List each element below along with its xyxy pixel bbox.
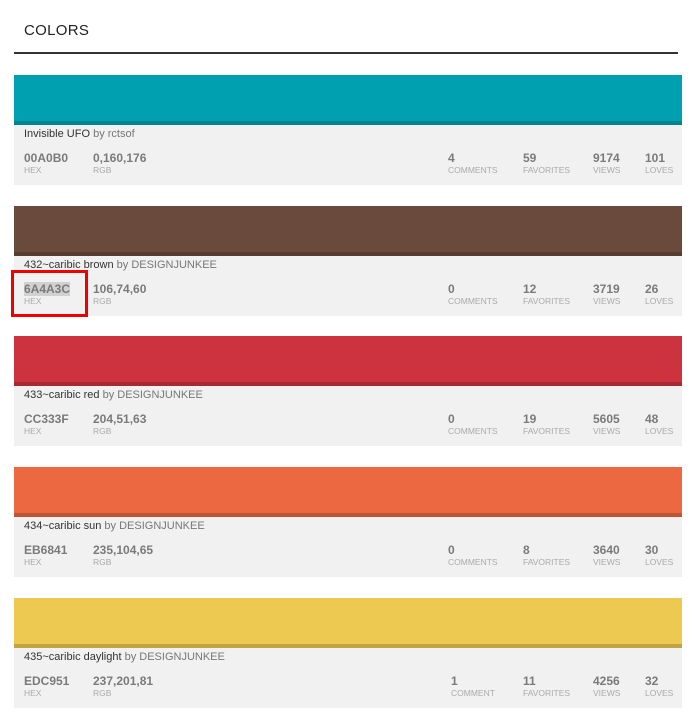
info panel: HEX — [24, 688, 41, 698]
info panel: 48 — [645, 412, 658, 426]
info panel: 0 — [448, 543, 455, 557]
info panel: LOVES — [645, 557, 673, 567]
info panel: 12 — [523, 282, 536, 296]
info panel: 101 — [645, 151, 665, 165]
card: caribic daylight — [14, 598, 682, 708]
info panel: 434~caribic sun by DESIGNJUNKEE — [24, 520, 205, 532]
info panel: 9174 — [593, 151, 620, 165]
info panel: 237,201,81 — [93, 674, 153, 688]
info panel: 204,51,63 — [93, 412, 146, 426]
info panel: 8 — [523, 543, 530, 557]
info panel: LOVES — [645, 296, 673, 306]
info panel — [14, 386, 682, 446]
swatch — [14, 598, 682, 648]
info panel: Invisible UFO by rctsof — [24, 128, 135, 140]
card: caribic red — [14, 336, 682, 446]
info panel: 59 — [523, 151, 536, 165]
info panel: RGB — [93, 165, 111, 175]
info panel: 00A0B0 — [24, 151, 68, 165]
info panel: 26 — [645, 282, 658, 296]
info panel: EB6841 — [24, 543, 67, 557]
info panel: CC333F — [24, 412, 69, 426]
info panel — [14, 517, 682, 577]
info panel: COMMENTS — [448, 296, 498, 306]
info panel: 30 — [645, 543, 658, 557]
info panel: RGB — [93, 557, 111, 567]
info panel: 4 — [448, 151, 455, 165]
info panel: COMMENTS — [448, 426, 498, 436]
info panel: 106,74,60 — [93, 282, 146, 296]
info panel: HEX — [24, 557, 41, 567]
info panel: FAVORITES — [523, 688, 570, 698]
info panel: VIEWS — [593, 426, 620, 436]
info panel: LOVES — [645, 165, 673, 175]
info panel: 433~caribic red by DESIGNJUNKEE — [24, 389, 203, 401]
info panel: VIEWS — [593, 557, 620, 567]
info panel: RGB — [93, 688, 111, 698]
info panel: FAVORITES — [523, 557, 570, 567]
info panel: HEX — [24, 426, 41, 436]
info panel — [14, 648, 682, 708]
info panel: FAVORITES — [523, 426, 570, 436]
info panel: RGB — [93, 426, 111, 436]
info panel — [14, 256, 682, 316]
info panel — [14, 125, 682, 185]
card: caribic brown — [11, 206, 682, 317]
info panel: HEX — [24, 296, 41, 306]
info panel: FAVORITES — [523, 296, 570, 306]
info panel: LOVES — [645, 426, 673, 436]
swatch — [14, 206, 682, 256]
info panel: RGB — [93, 296, 111, 306]
info panel: 6A4A3C — [24, 282, 70, 296]
info panel: 1 — [451, 674, 458, 688]
info panel: 0 — [448, 412, 455, 426]
info panel: COMMENTS — [448, 165, 498, 175]
info panel: VIEWS — [593, 688, 620, 698]
swatch — [14, 75, 682, 125]
info panel: COMMENT — [451, 688, 495, 698]
highlight box — [11, 270, 88, 317]
info panel: 0,160,176 — [93, 151, 146, 165]
info panel: FAVORITES — [523, 165, 570, 175]
card: caribic sun — [14, 467, 682, 577]
swatch — [14, 467, 682, 517]
swatch — [14, 336, 682, 386]
card: Invisible UFO — [14, 75, 682, 185]
info panel: 19 — [523, 412, 536, 426]
info panel: 11 — [523, 674, 536, 688]
info panel: 5605 — [593, 412, 620, 426]
info panel: VIEWS — [593, 296, 620, 306]
info panel: 235,104,65 — [93, 543, 153, 557]
info panel: 435~caribic daylight by DESIGNJUNKEE — [24, 651, 225, 663]
info panel: 3719 — [593, 282, 620, 296]
info panel: 32 — [645, 674, 658, 688]
info panel: VIEWS — [593, 165, 620, 175]
info panel: COMMENTS — [448, 557, 498, 567]
title: COLORS — [24, 22, 89, 39]
info panel: HEX — [24, 165, 41, 175]
info panel: 3640 — [593, 543, 620, 557]
info panel: 4256 — [593, 674, 620, 688]
info panel: 432~caribic brown by DESIGNJUNKEE — [24, 259, 217, 271]
info panel: EDC951 — [24, 674, 69, 688]
info panel: 0 — [448, 282, 455, 296]
info panel: LOVES — [645, 688, 673, 698]
